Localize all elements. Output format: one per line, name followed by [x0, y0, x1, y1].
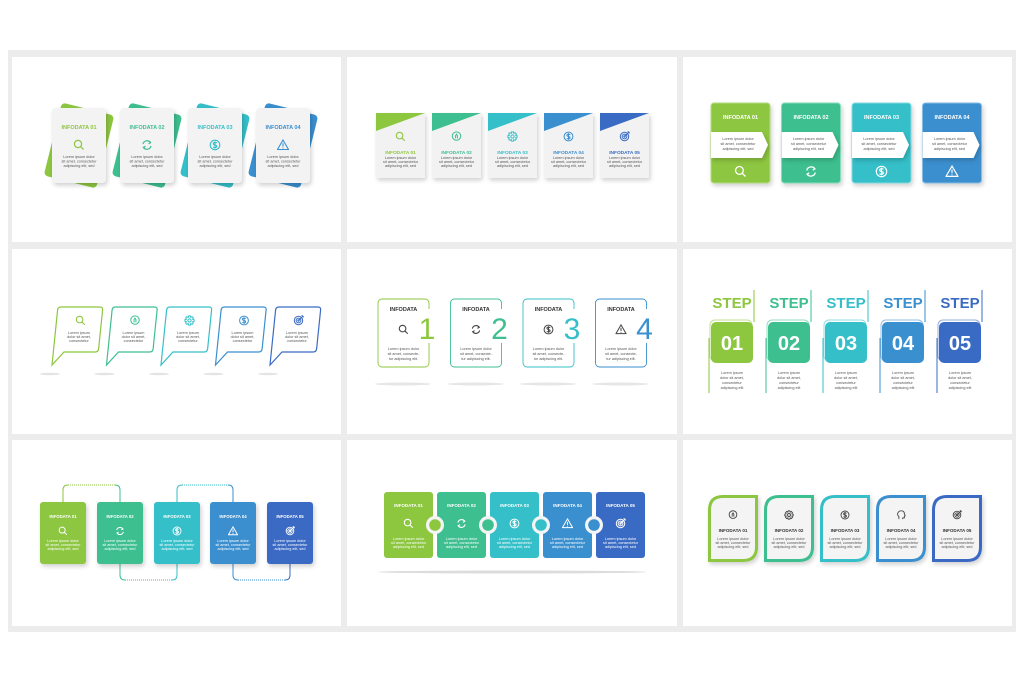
block 01: adipiscing elit, sed [393, 545, 424, 549]
card 02 [112, 103, 182, 188]
block 05: INFODATA 05 [606, 503, 635, 508]
step 04: 04 [892, 333, 915, 355]
bubble 4: Lorem ipsum [232, 331, 253, 335]
card 05: adipiscing elit, sed [609, 164, 640, 168]
card 04: sit amet, consectetur [215, 543, 251, 547]
connector circles [426, 516, 603, 534]
step 01 [709, 290, 754, 393]
card 1: INFODATA [390, 307, 417, 313]
leaf 03: sit amet, consectetur [827, 541, 863, 545]
card 2: sit amet, consecte- [460, 352, 493, 356]
block 01: Lorem ipsum dolor [393, 537, 425, 541]
bubble 5: consectetur [287, 339, 308, 343]
leaf 01 [708, 495, 758, 562]
leaf 05 [932, 495, 982, 562]
block 02 [437, 492, 486, 558]
leaf 04: adipiscing elit, sed [885, 545, 917, 549]
card 2: tur adipiscing elit. [461, 357, 491, 361]
block 04 [543, 492, 592, 558]
card 01: Lorem ipsum dolor [385, 156, 417, 160]
card 03: INFODATA 03 [864, 115, 899, 121]
step 03: adipiscing elit [835, 386, 858, 390]
block 05 [596, 492, 645, 558]
step 03: 03 [835, 333, 857, 355]
bubble 5: Lorem ipsum [286, 331, 308, 335]
bubble 1: Lorem ipsum [68, 331, 90, 335]
card 01: Lorem ipsum dolor [63, 155, 95, 159]
card 01: INFODATA 01 [61, 125, 97, 131]
card 04: Lorem ipsum dolor [217, 539, 249, 543]
card 03: Lorem ipsum dolor [161, 539, 193, 543]
card 04: Lorem ipsum dolor [267, 155, 299, 159]
card 1: Lorem ipsum dolor [388, 347, 420, 351]
card 05: sit amet, consectetur [272, 543, 308, 547]
card 4: INFODATA [607, 307, 635, 313]
panel: joined blocks with circles [377, 492, 647, 574]
block 02: sit amet, consectetur [444, 541, 480, 545]
card 04 [210, 502, 256, 564]
step 04: dolor sit amet, [891, 376, 915, 380]
card 05: INFODATA 05 [276, 514, 304, 519]
card 03: sit amet, consectetur [159, 543, 195, 547]
block 03: adipiscing elit, sed [499, 545, 530, 549]
leaf 02: Lorem ipsum dolor [773, 537, 805, 541]
card 3: Lorem ipsum dolor [533, 347, 565, 351]
leaf 03: adipiscing elit, sed [829, 545, 861, 549]
block 01: sit amet, consectetur [391, 541, 427, 545]
step 02: 02 [778, 333, 800, 355]
leaf 01: INFODATA 01 [719, 528, 748, 533]
card 01: INFODATA 01 [723, 115, 758, 121]
card 01: adipiscing elit, sed [722, 147, 754, 151]
card 04 [544, 113, 593, 178]
card 02: INFODATA 02 [441, 150, 472, 156]
panel: numbered outline cards [375, 299, 653, 386]
leaf 04: INFODATA 04 [887, 528, 916, 533]
card 3: tur adipiscing elit. [534, 357, 563, 361]
card 03 [180, 103, 250, 188]
card 05: INFODATA 05 [609, 150, 640, 156]
bubble 3: consectetur [178, 339, 199, 343]
bubble 1: consectetur [69, 339, 90, 343]
leaf 04 [876, 495, 926, 562]
card 3: sit amet, consecte- [533, 352, 565, 356]
card 1: sit amet, consecte- [388, 352, 420, 356]
block 02: INFODATA 02 [447, 503, 476, 508]
card 03: adipiscing elit, sed [199, 164, 231, 168]
leaf 02: INFODATA 02 [775, 528, 804, 533]
panel: triangle header cards [376, 113, 649, 178]
card 04: sit amet, consectetur [551, 160, 587, 164]
leaf 05: INFODATA 05 [943, 528, 972, 533]
card 04: INFODATA 04 [934, 115, 970, 121]
card 02 [432, 113, 481, 178]
card 01 [711, 103, 770, 183]
block 04: INFODATA 04 [553, 503, 582, 508]
block 05: adipiscing elit, sed [605, 545, 636, 549]
step 02: dolor sit amet, [777, 376, 801, 380]
step 03: Lorem ipsum [835, 371, 857, 375]
card 02: sit amet, consectetur [439, 160, 475, 164]
card 3: INFODATA [535, 307, 562, 313]
card 03: adipiscing elit, sed [863, 147, 895, 151]
card 03 [852, 103, 911, 183]
leaf 01: adipiscing elit, sed [717, 545, 749, 549]
bubble 1: dolor sit amet, [67, 335, 91, 339]
card 04: adipiscing elit, sed [553, 164, 584, 168]
block 04: adipiscing elit, sed [552, 545, 583, 549]
step 05: Lorem ipsum [949, 371, 971, 375]
step 03 [823, 290, 868, 393]
bubble 2: Lorem ipsum [123, 331, 144, 335]
card 02: Lorem ipsum dolor [441, 156, 473, 160]
card 03: adipiscing elit, sed [161, 547, 193, 551]
step 02 [766, 290, 811, 393]
card 01: sit amet, consectetur [61, 160, 97, 164]
step 04: consectetur [893, 381, 914, 385]
leaf 04: sit amet, consectetur [883, 541, 919, 545]
block 04: sit amet, consectetur [550, 541, 586, 545]
bubble 1 [40, 307, 103, 375]
card 01: adipiscing elit, sed [47, 547, 79, 551]
card 02: adipiscing elit, sed [793, 147, 824, 151]
block 03: Lorem ipsum dolor [499, 537, 531, 541]
card 01: INFODATA 01 [385, 150, 416, 156]
leaf 02 [764, 495, 814, 562]
leaf 02: sit amet, consectetur [771, 541, 807, 545]
block 03: INFODATA 03 [500, 503, 529, 508]
bubble 3: dolor sit amet, [176, 335, 200, 339]
card 04 [248, 103, 318, 188]
step 01: 01 [721, 333, 743, 355]
card 03: INFODATA 03 [163, 514, 191, 519]
block 01: INFODATA 01 [394, 503, 423, 508]
shadow line [377, 570, 647, 574]
card 1: tur adipiscing elit. [389, 357, 418, 361]
card 02: adipiscing elit, sed [441, 164, 472, 168]
bubble 3 [149, 307, 212, 375]
step 02: Lorem ipsum [778, 371, 800, 375]
leaf 05: adipiscing elit, sed [941, 545, 973, 549]
card 03: Lorem ipsum dolor [199, 155, 231, 159]
card 05: adipiscing elit, sed [274, 547, 306, 551]
card 1: 1 [419, 313, 435, 346]
card 04: INFODATA 04 [265, 125, 301, 131]
step 04: adipiscing elit [892, 386, 915, 390]
leaf 03: Lorem ipsum dolor [829, 537, 861, 541]
block 05: Lorem ipsum dolor [605, 537, 637, 541]
card 04: adipiscing elit, sed [934, 147, 965, 151]
step 05: adipiscing elit [949, 386, 972, 390]
step 04 [880, 290, 925, 393]
block 03: sit amet, consectetur [497, 541, 533, 545]
panel: connected cards [40, 485, 313, 580]
bubble 5: dolor sit amet, [285, 335, 309, 339]
card 02: sit amet, consectetur [791, 142, 827, 146]
step 01: consectetur [722, 381, 743, 385]
card 05: Lorem ipsum dolor [274, 539, 306, 543]
step 02: STEP [769, 295, 809, 312]
card 3 [520, 299, 580, 386]
panel: leaf cards [708, 495, 982, 562]
card 2: Lorem ipsum dolor [460, 347, 492, 351]
card 03: sit amet, consectetur [861, 142, 897, 146]
card 4 [592, 299, 653, 386]
step 03: dolor sit amet, [834, 376, 858, 380]
card 02: Lorem ipsum dolor [131, 155, 163, 159]
card 02: adipiscing elit, sed [104, 547, 136, 551]
step 01: STEP [712, 295, 752, 312]
step 01: Lorem ipsum [721, 371, 743, 375]
card 03: Lorem ipsum dolor [863, 137, 895, 141]
card 02: Lorem ipsum dolor [104, 539, 136, 543]
card 01 [44, 103, 114, 188]
block 01 [384, 492, 433, 558]
card 05 [600, 113, 649, 178]
leaf 03 [820, 495, 870, 562]
card 04: Lorem ipsum dolor [934, 137, 966, 141]
card 4: tur adipiscing elit. [606, 357, 636, 361]
card 01: adipiscing elit, sed [63, 164, 95, 168]
leaf 01: Lorem ipsum dolor [717, 537, 749, 541]
block 04: Lorem ipsum dolor [552, 537, 584, 541]
leaf 01: sit amet, consectetur [715, 541, 751, 545]
card 02: sit amet, consectetur [102, 543, 138, 547]
card 03: adipiscing elit, sed [497, 164, 528, 168]
card 01 [376, 113, 425, 178]
step 01: adipiscing elit [721, 386, 744, 390]
card 4: sit amet, consecte- [605, 352, 638, 356]
bubble 3: Lorem ipsum [177, 331, 199, 335]
leaf 03: INFODATA 03 [831, 528, 860, 533]
connectors [63, 485, 290, 580]
card 01: sit amet, consectetur [720, 142, 756, 146]
bubble 2 [94, 307, 157, 375]
card 03: INFODATA 03 [197, 125, 233, 131]
panel: steps [709, 290, 982, 393]
leaf 05: Lorem ipsum dolor [941, 537, 973, 541]
step 04: STEP [883, 295, 923, 312]
card 03: sit amet, consectetur [495, 160, 531, 164]
panel: speech bubbles [40, 307, 321, 375]
step 03: STEP [826, 295, 866, 312]
card 04: INFODATA 04 [553, 150, 584, 156]
card 05: sit amet, consectetur [607, 160, 643, 164]
bubble 4 [204, 307, 266, 375]
card 02: adipiscing elit, sed [131, 164, 163, 168]
step 02: adipiscing elit [778, 386, 801, 390]
card 04: sit amet, consectetur [932, 142, 968, 146]
card 01: Lorem ipsum dolor [47, 539, 79, 543]
step 01: dolor sit amet, [720, 376, 744, 380]
card 03: Lorem ipsum dolor [497, 156, 529, 160]
card 02: INFODATA 02 [793, 115, 829, 121]
bubble 4: consectetur [233, 339, 253, 343]
card 02 [782, 103, 840, 183]
card 01: Lorem ipsum dolor [722, 137, 754, 141]
card 05: Lorem ipsum dolor [609, 156, 641, 160]
card 03 [154, 502, 200, 564]
card 01: sit amet, consectetur [383, 160, 419, 164]
card 01: INFODATA 01 [49, 514, 77, 519]
block 05: sit amet, consectetur [603, 541, 639, 545]
block 02: adipiscing elit, sed [446, 545, 477, 549]
step 04: Lorem ipsum [892, 371, 914, 375]
step 05: dolor sit amet, [948, 376, 972, 380]
panel: rotated cards [44, 103, 318, 188]
leaf 05: sit amet, consectetur [939, 541, 975, 545]
card 05 [267, 502, 313, 564]
step 05 [937, 290, 982, 393]
step 05: STEP [940, 295, 980, 312]
card 03 [488, 113, 537, 178]
card 04 [922, 103, 982, 183]
leaf 04: Lorem ipsum dolor [885, 537, 917, 541]
card 04: adipiscing elit, sed [217, 547, 249, 551]
card 04: sit amet, consectetur [265, 160, 301, 164]
card 02: INFODATA 02 [129, 125, 165, 131]
bubble 2: dolor sit amet, [122, 335, 145, 339]
card 4: Lorem ipsum dolor [605, 347, 637, 351]
card 02: INFODATA 02 [106, 514, 134, 519]
bubble 2: consectetur [124, 339, 144, 343]
leaf 02: adipiscing elit, sed [773, 545, 805, 549]
card 4: 4 [636, 313, 653, 346]
step 05: consectetur [950, 381, 971, 385]
card 02: sit amet, consectetur [129, 160, 165, 164]
card 04: INFODATA 04 [219, 514, 247, 519]
card 2 [448, 299, 508, 386]
panel: colored cards with arrow bands [711, 103, 982, 183]
bubble 4: dolor sit amet, [231, 335, 254, 339]
card 1 [375, 299, 435, 386]
step 05: 05 [949, 333, 971, 355]
card 2: 2 [491, 313, 508, 346]
card 04: adipiscing elit, sed [267, 164, 299, 168]
step 02: consectetur [779, 381, 800, 385]
card 03: sit amet, consectetur [197, 160, 233, 164]
step 03: consectetur [836, 381, 857, 385]
card 2: INFODATA [462, 307, 490, 313]
card 02: Lorem ipsum dolor [793, 137, 825, 141]
block 02: Lorem ipsum dolor [446, 537, 478, 541]
card 01: adipiscing elit, sed [385, 164, 416, 168]
bubble 5 [258, 307, 321, 375]
card 03: INFODATA 03 [497, 150, 528, 156]
card 01 [40, 502, 86, 564]
card 02 [97, 502, 143, 564]
card 04: Lorem ipsum dolor [553, 156, 585, 160]
card 01: sit amet, consectetur [45, 543, 81, 547]
card 3: 3 [564, 313, 580, 346]
block 03 [490, 492, 539, 558]
